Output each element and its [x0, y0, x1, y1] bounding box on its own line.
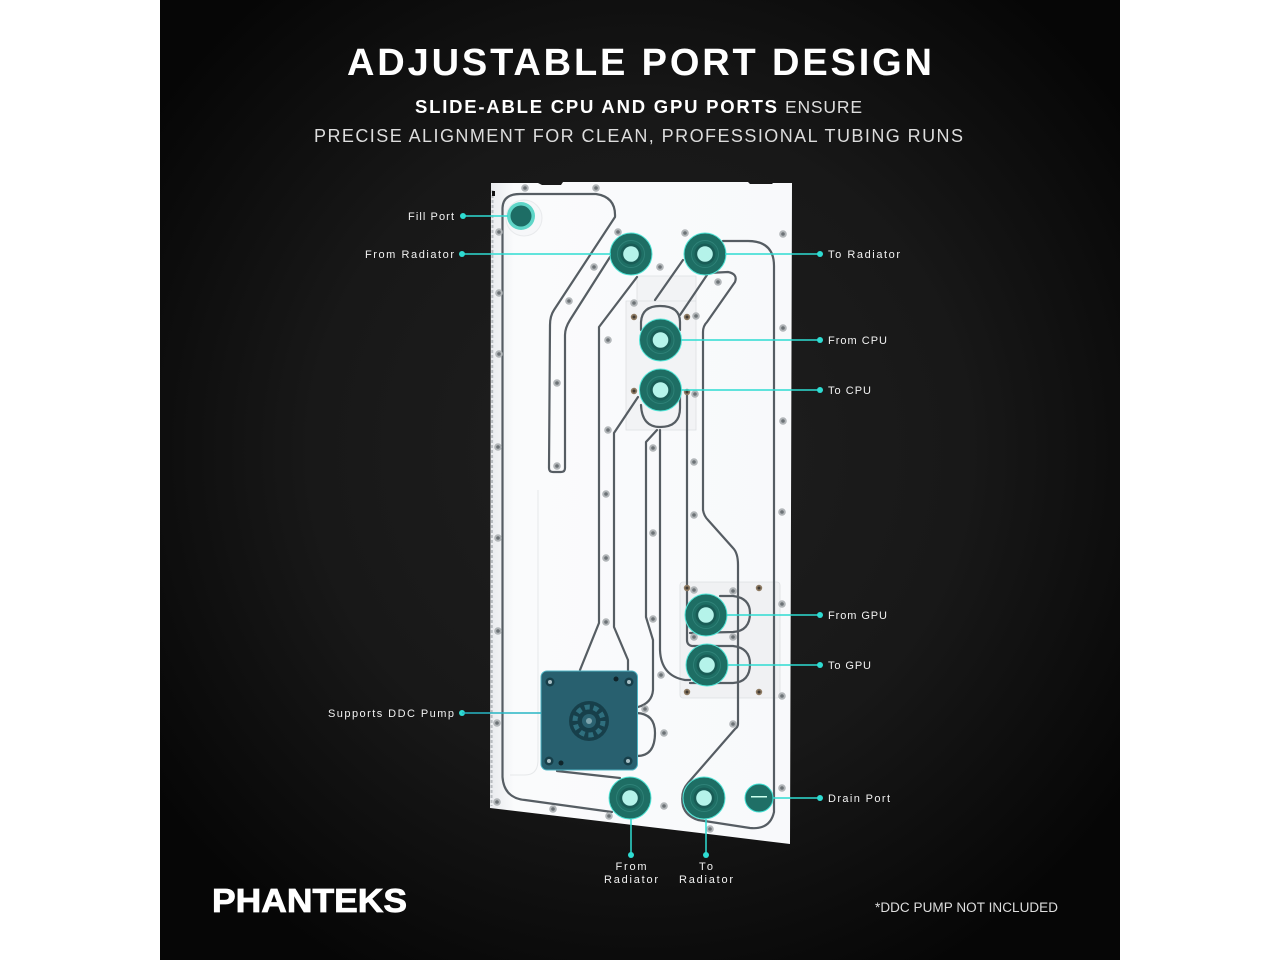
callout: From Radiator: From Radiator [365, 249, 454, 261]
callout: From CPU [681, 335, 887, 347]
icon: bottom to radiator port [683, 777, 725, 819]
coolant channels [502, 194, 774, 828]
callout: Supports DDC Pump: Supports DDC Pump [328, 708, 454, 720]
icon: from CPU port [640, 319, 682, 361]
callout: From Radiator [365, 249, 611, 261]
callout: bottom To Radiator: Radiator [679, 874, 733, 886]
callout: bottom From Radiator: From [616, 861, 646, 873]
CPU slider plate [626, 276, 696, 430]
GPU slider plate [680, 582, 780, 698]
icon: to radiator port [684, 233, 726, 275]
callout: Fill Port [408, 211, 508, 223]
icon: DDC pump [541, 671, 638, 770]
callout: Drain Port [773, 793, 890, 805]
callout: bottom From Radiator: Radiator [604, 874, 658, 886]
plate body [490, 182, 792, 844]
callout: To CPU: To CPU [828, 385, 871, 397]
logo: Phanteks: PHANTEKS [212, 882, 407, 919]
icon: to GPU port [686, 644, 728, 686]
callout: bottom To Radiator [679, 819, 733, 886]
icon: from radiator port [610, 233, 652, 275]
callout: Drain Port: Drain Port [828, 793, 890, 805]
title: ADJUSTABLE PORT DESIGN [347, 42, 932, 84]
icon: to CPU port [640, 369, 682, 411]
callout: To CPU [681, 385, 871, 397]
dark background panel [160, 0, 1120, 960]
callout: bottom From Radiator [604, 819, 658, 886]
faint pump recess [510, 490, 538, 775]
callout: From GPU: From GPU [828, 610, 887, 622]
distribution plate [490, 182, 792, 844]
callout: To Radiator [725, 249, 900, 261]
subtitle: SLIDE-ABLE CPU AND GPU PORTS [415, 96, 777, 117]
fill port halo [506, 200, 542, 236]
callout: bottom To Radiator: To [699, 861, 713, 873]
icon: bottom from radiator port [609, 777, 651, 819]
icon: drain port [745, 784, 773, 812]
callout: Supports DDC Pump [328, 708, 541, 720]
footnote: *DDC PUMP NOT INCLUDED [875, 900, 1058, 915]
plate left edge [492, 190, 493, 806]
callout: To GPU: To GPU [828, 660, 871, 672]
callout: Fill Port: Fill Port [408, 211, 454, 223]
callout: From CPU: From CPU [828, 335, 887, 347]
callout: To Radiator: To Radiator [828, 249, 900, 261]
subtitle: ENSURE [785, 97, 862, 117]
subtitle [314, 96, 963, 146]
icon: from GPU port [685, 594, 727, 636]
mounting screws [493, 184, 787, 833]
icon: fill port [507, 202, 535, 230]
callout: To GPU [728, 660, 871, 672]
subtitle: PRECISE ALIGNMENT FOR CLEAN, PROFESSIONAL TUBING RUNS [314, 126, 963, 146]
callout: From GPU [727, 610, 887, 622]
